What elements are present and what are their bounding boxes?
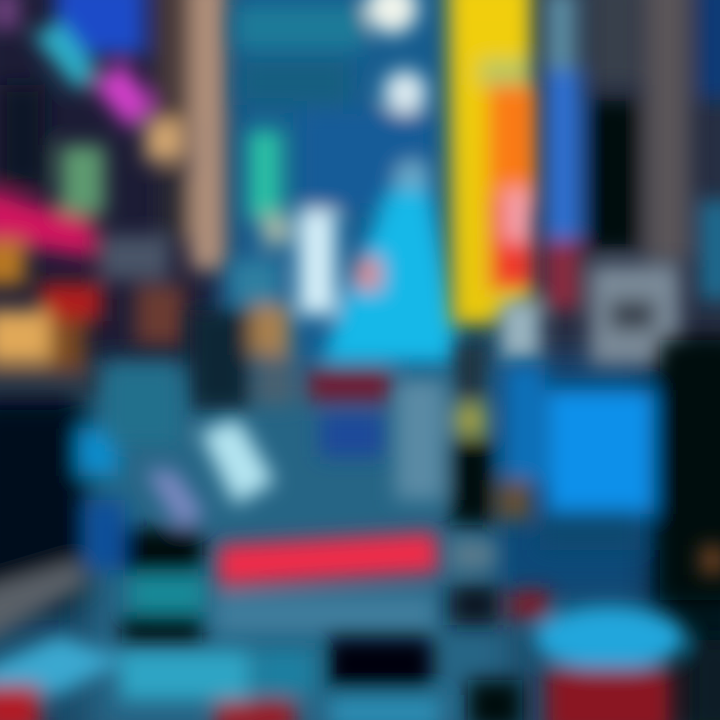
bottom foreground (0, 540, 720, 720)
right buildings (500, 0, 720, 365)
left building signs (0, 0, 226, 395)
lower left street (0, 365, 275, 645)
yellow and orange billboard (448, 0, 538, 325)
blue screen on the right (395, 340, 720, 600)
centre street and tower (190, 0, 462, 457)
red sign (215, 532, 440, 633)
